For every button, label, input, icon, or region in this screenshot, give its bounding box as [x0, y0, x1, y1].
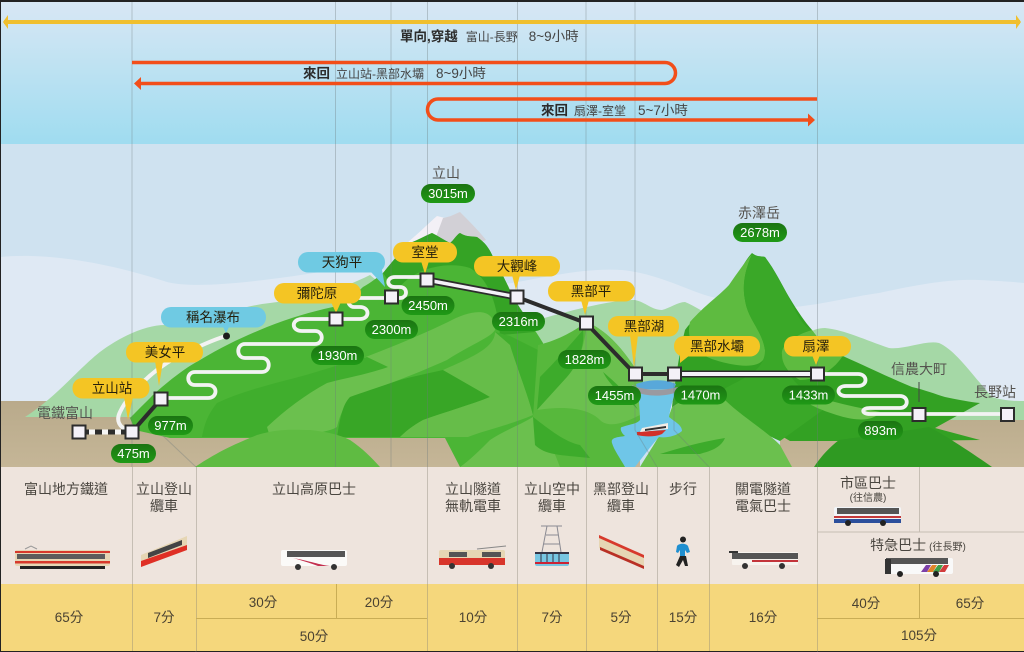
altitude: 2678m: 2678m: [740, 225, 780, 240]
callout: Bijodaira: 美女平: [145, 344, 185, 360]
route: Tateyama cable car: [132, 399, 161, 432]
route: railway dashed: [79, 430, 132, 434]
callout: Kurobedaira: [548, 281, 635, 315]
altitude: 1433m: [782, 386, 835, 404]
pale distant hills: [25, 275, 1024, 420]
time: walk: 15分: [669, 610, 698, 625]
time: bus second leg: 20分: [365, 595, 394, 610]
route: right bus route: [817, 374, 1007, 414]
callout: Murodo: [393, 242, 457, 274]
altitude: 1828m: [558, 350, 611, 369]
callout: Daikanbo: 大觀峰: [497, 259, 538, 274]
panel: duration row: [1, 584, 1024, 651]
panel: route duration band: [1, 2, 1024, 144]
callout: Kurobe dam: 黑部水壩: [690, 339, 744, 354]
decorative vertical guide lines: [132, 2, 818, 652]
altitude: 1828m: 1828m: [565, 352, 604, 367]
heading: tunnel trolley: 無軌電車: [445, 498, 501, 514]
altitude: 893m: 893m: [864, 423, 897, 438]
altitude: 2300m: [365, 320, 418, 339]
callout: Bijodaira: [126, 342, 203, 386]
icon: ropeway: [535, 526, 569, 566]
table dividers: [132, 467, 1024, 651]
time: tunnel trolley: 10分: [459, 610, 488, 625]
icon: Tateyama cable car: [141, 536, 187, 567]
time: Toyama railway: 65分: [55, 610, 84, 625]
altitude: 2450m: 2450m: [408, 298, 448, 313]
altitude: 977m: [148, 416, 193, 435]
time: Kurobe cable car: 5分: [610, 610, 632, 625]
heading: Highland bus: 立山高原巴士: [272, 481, 356, 497]
heading: walk: 步行: [669, 481, 697, 497]
ground left: [1, 401, 210, 467]
callout: Murodo: 室堂: [412, 244, 438, 260]
icon: trolley bus: [439, 546, 506, 569]
text: one-way route: 單向,穿越 富山-長野 8~9小時: [400, 28, 579, 44]
icon: express bus: [885, 558, 953, 577]
heading: city bus: (往信農): [850, 491, 886, 504]
peak name: Tateyama: 立山: [432, 165, 460, 181]
station name: Dentetsu Toyama: 電鐵富山: [37, 405, 93, 421]
icon: walking person: [676, 536, 690, 567]
heading: Kurobe cable car: 黑部登山: [593, 481, 649, 497]
heading: Toyama railway: 富山地方鐵道: [24, 481, 108, 497]
text: return route Tateyama: 來回 立山站-黑部水壩 8~9小時: [303, 66, 486, 81]
callout: Tengudaira: 天狗平: [322, 255, 362, 270]
mountain: Tateyama main body: [130, 233, 560, 467]
ground centre and right: [180, 403, 1024, 467]
callout: Ogizawa: 扇澤: [802, 339, 830, 354]
callout: Kurobe dam: [674, 336, 760, 363]
heading: ropeway: 纜車: [538, 498, 566, 514]
mountain: Akazawa peak: [640, 253, 980, 467]
altitude: 2450m: [402, 296, 454, 315]
mountain: Tateyama snow peak: [407, 212, 486, 250]
time: right total: 105分: [901, 628, 938, 643]
arrow: one-way route: [3, 15, 1021, 29]
altitude: 2316m: [492, 312, 545, 331]
callout: Midagahara: [274, 283, 361, 313]
time: Tateyama cable car: 7分: [153, 610, 175, 625]
altitude: 2678m: [733, 223, 787, 242]
callout: Kurobeko: 黑部湖: [624, 319, 664, 334]
station name: Shinano-Omachi: [891, 361, 947, 402]
icon: Toyama train: [15, 546, 110, 569]
route: Kanden tunnel: [674, 370, 817, 378]
altitude: 2300m: 2300m: [372, 322, 411, 337]
route: ropeway upper: [427, 280, 517, 297]
heading: Tateyama cable car: 纜車: [150, 498, 178, 514]
altitude: 3015m: 3015m: [428, 186, 468, 201]
time: express leg: 65分: [956, 596, 985, 611]
panel: transport table: [1, 467, 1024, 584]
altitude: 2316m: 2316m: [499, 314, 538, 329]
altitude: 1930m: 1930m: [318, 348, 357, 363]
callout: Tengudaira: [298, 252, 385, 287]
boat on Lake Kurobe: [637, 423, 668, 436]
altitude: 475m: 475m: [117, 446, 150, 461]
callout: Shomyo falls: 稱名瀑布: [186, 310, 240, 325]
station name: Shinano-Omachi: 信農大町: [891, 361, 947, 377]
time: city bus: 40分: [852, 596, 881, 611]
peak name: Akazawa: 赤澤岳: [738, 205, 780, 221]
icon: Kanden electric bus: [729, 552, 798, 569]
callout: Daikanbo: [474, 256, 560, 290]
time: bus first leg: 30分: [249, 595, 278, 610]
altitude: 1433m: 1433m: [789, 388, 828, 402]
heading: Tateyama cable car: 立山登山: [136, 481, 192, 497]
callout: Shomyo falls: [161, 307, 266, 333]
altitude: 1470m: 1470m: [681, 388, 720, 402]
callout: Kurobeko: [608, 316, 679, 368]
altitude: 1470m: [674, 386, 727, 404]
callout: Kurobedaira: 黑部平: [571, 284, 611, 299]
heading: Kurobe cable car: 纜車: [607, 498, 635, 514]
time: ropeway: 7分: [541, 610, 563, 625]
station name: Nagano: 長野站: [974, 384, 1016, 400]
callout: Ogizawa: [784, 336, 851, 365]
mountain: Kurobe-daira ridge: [533, 322, 660, 467]
mountain: right foreground hill: [814, 427, 992, 467]
icon: city bus: [834, 507, 901, 526]
arrow: return route Ogizawa: [428, 99, 817, 126]
callout: Midagahara: 彌陀原: [297, 286, 337, 301]
heading: Kanden trolley: 關電隧道: [735, 481, 791, 497]
route: Kurobe ropeway and cable: [517, 297, 674, 374]
icon: highland bus: [281, 550, 347, 570]
text: return route Ogizawa: 來回 扇澤-室堂 5~7小時: [541, 103, 688, 118]
icon: Kurobe cable car: [599, 535, 644, 569]
callout: Tateyama station: 立山站: [92, 381, 132, 396]
time: bus total: 50分: [300, 629, 329, 644]
heading: express bus: 特急巴士 (往長野): [870, 537, 966, 553]
route: white bus route lower: [161, 277, 427, 398]
station nodes: [72, 274, 1014, 438]
altitude: 475m: [111, 444, 156, 463]
mountain: central foreground slope: [460, 397, 624, 467]
time: Kanden trolley: 16分: [749, 610, 778, 625]
heading: tunnel trolley: 立山隧道: [445, 481, 501, 497]
duration dividers: [196, 584, 1024, 618]
heading: ropeway: 立山空中: [524, 481, 580, 497]
panel: sky: [1, 144, 1024, 468]
river and lake: [612, 386, 682, 467]
heading: Kanden trolley: 電氣巴士: [735, 498, 791, 514]
altitude: 1455m: [588, 386, 641, 405]
altitude: 977m: 977m: [154, 418, 187, 433]
altitude: 893m: [858, 421, 903, 440]
altitude: 1930m: [311, 346, 364, 365]
callout: Tateyama station: [72, 378, 150, 420]
altitude: 3015m: [421, 184, 475, 203]
arrow: return route Tateyama: [132, 62, 676, 90]
heading: city bus: 市區巴士: [840, 475, 896, 491]
haze layer: [1, 256, 1024, 410]
altitude: 1455m: 1455m: [595, 388, 634, 403]
route: waterfall branch: [118, 336, 226, 432]
route: waterfall point: [223, 332, 230, 340]
dam: [632, 380, 678, 396]
mountain: left foreground mound: [195, 430, 380, 467]
